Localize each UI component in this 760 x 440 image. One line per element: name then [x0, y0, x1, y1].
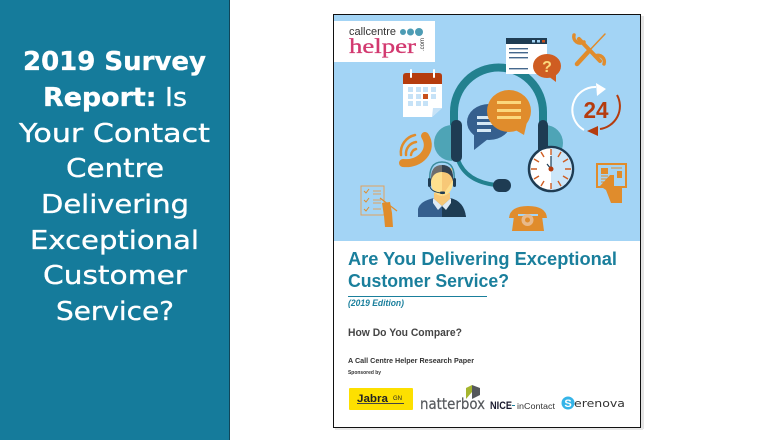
panel: left title: 2019 Survey	[23, 47, 206, 77]
icon: web window	[506, 38, 547, 74]
logo: NICE inContact	[490, 400, 556, 412]
icon: desk telephone	[509, 206, 547, 231]
logo: callcentre helper: callcentre	[349, 26, 396, 38]
icon: question bubble: ?	[542, 59, 552, 76]
edition label: (2019 Edition)	[348, 298, 404, 308]
panel: left title: Centre	[66, 154, 164, 184]
heading: cover title: Customer Service?	[348, 271, 509, 291]
cover illustration background	[334, 15, 640, 241]
icon: tools	[574, 34, 605, 64]
icon: calendar	[403, 69, 442, 117]
panel: left title	[0, 0, 230, 440]
logo: Jabra: GN	[393, 396, 402, 402]
heading: cover title: Are You Delivering Exceptional	[348, 249, 617, 269]
icon: call agent	[418, 162, 466, 217]
icon: orange speech bubble	[487, 90, 531, 135]
icon: orange telephone receiver	[401, 135, 428, 163]
logo: callcentre helper: helper	[349, 34, 416, 58]
icon: checklist with hand	[361, 186, 397, 227]
subheading: How Do You Compare?	[348, 327, 462, 339]
icon: clock	[529, 147, 573, 191]
logo: Serenova	[562, 396, 625, 410]
logo: Jabra	[349, 388, 413, 410]
report cover	[334, 14, 644, 430]
sponsored by label: Sponsored by	[348, 370, 381, 376]
logo: NICE inContact: inContact	[517, 401, 556, 411]
icon: 24 hours: 24	[584, 97, 609, 123]
logo: Jabra: Jabra	[357, 393, 389, 405]
logo: callcentre helper	[334, 21, 435, 62]
panel: left title: Exceptional	[30, 226, 199, 256]
logo: Serenova: erenova	[574, 397, 625, 410]
icon: 24 hours	[572, 83, 620, 136]
panel: left title: Your Contact	[18, 119, 210, 149]
panel: left title: Delivering	[41, 190, 189, 220]
icon: question bubble	[533, 54, 561, 82]
panel: left title: Report: Is	[43, 83, 187, 113]
panel: left title: Customer	[43, 261, 187, 291]
logo: natterbox: natterbox	[420, 395, 485, 413]
icon: tablet with hand	[597, 164, 626, 203]
logo: Serenova: S	[564, 398, 572, 410]
logo: callcentre helper: .com	[420, 38, 426, 51]
panel: left title: Service?	[56, 297, 174, 327]
icon: headset	[434, 68, 563, 192]
heading: cover title	[348, 249, 617, 291]
icon: blue speech bubble	[467, 104, 511, 150]
logo: NICE inContact: NICE	[490, 400, 512, 412]
logo: natterbox	[420, 385, 485, 413]
research paper label: A Call Centre Helper Research Paper	[348, 356, 474, 365]
